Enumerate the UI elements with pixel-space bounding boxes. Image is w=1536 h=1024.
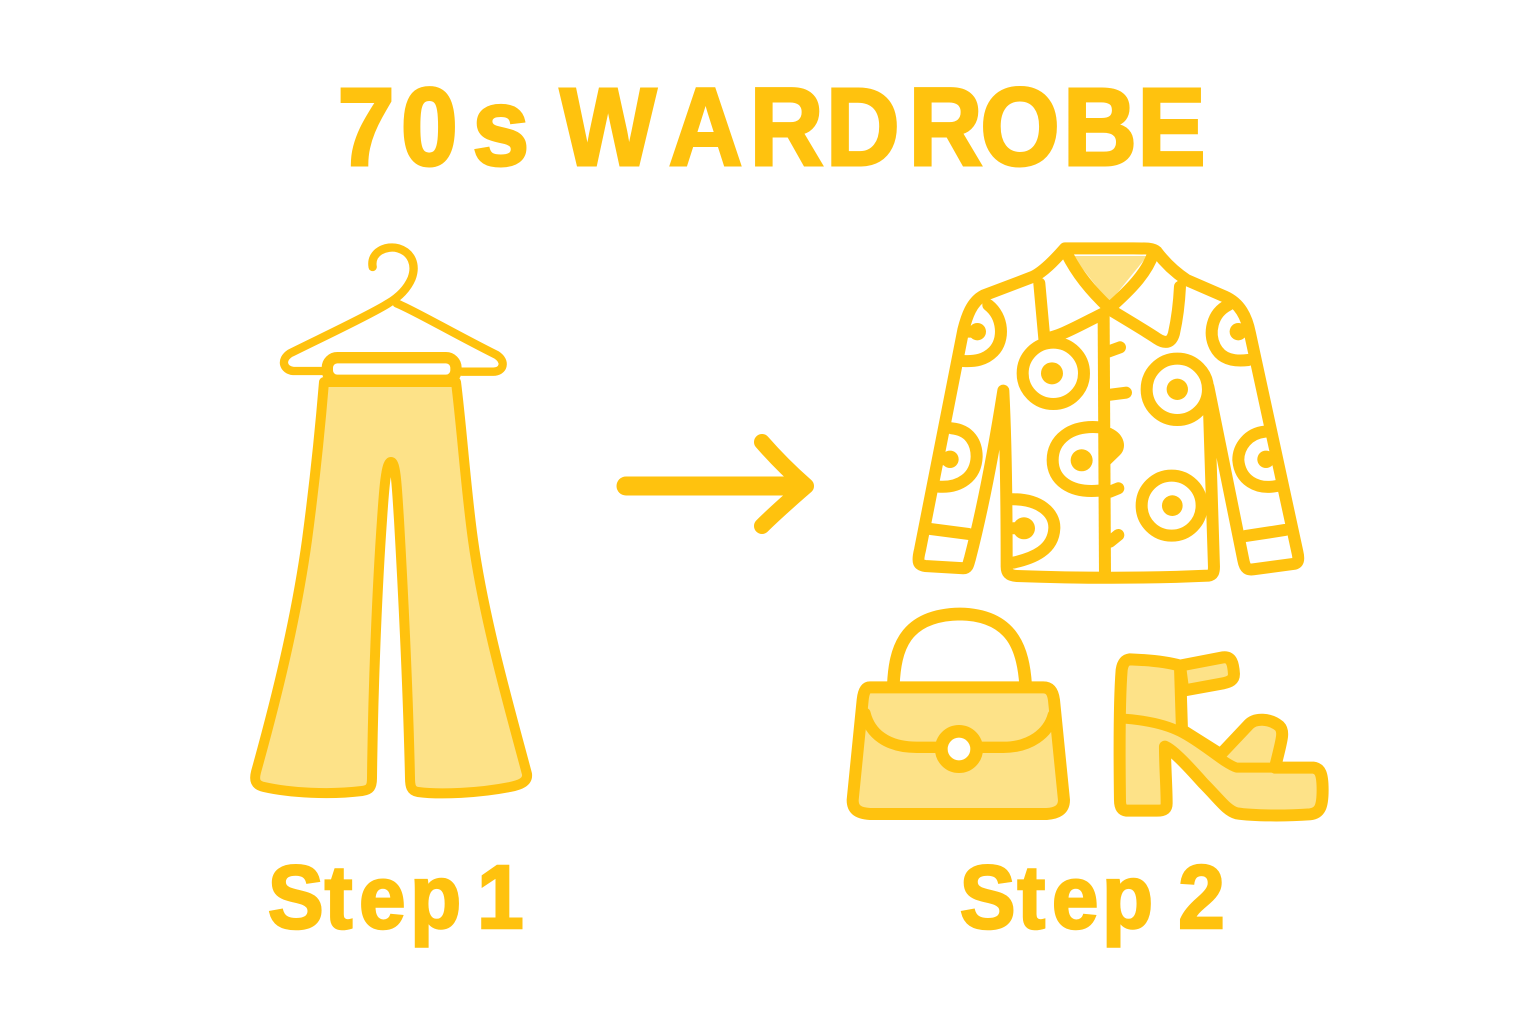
collar fill bbox=[1073, 256, 1147, 303]
jacket outline bbox=[918, 248, 1298, 578]
sandal divider bbox=[1120, 718, 1273, 768]
bag body bbox=[853, 687, 1064, 814]
collar bbox=[1067, 253, 1153, 308]
arrow bbox=[626, 442, 806, 526]
icon: patterned jacket bbox=[918, 248, 1298, 578]
sandal sole and heel bbox=[1120, 659, 1323, 815]
step 2 label: Step 2 bbox=[960, 847, 1225, 948]
icon: platform sandal bbox=[1120, 657, 1323, 815]
bag clasp bbox=[941, 731, 977, 767]
buttons bbox=[1108, 347, 1126, 542]
cuffs bbox=[930, 529, 1285, 536]
sandal strap bbox=[1180, 657, 1234, 691]
placket bbox=[1104, 317, 1105, 573]
connectors to swirl dots bbox=[943, 332, 1272, 528]
bag flap bbox=[865, 713, 1053, 747]
title: 70s WARDROBE bbox=[338, 66, 1206, 189]
icon: flared trousers on a hanger bbox=[255, 247, 527, 793]
icon: hanger bbox=[284, 247, 503, 380]
step 1 label: Step 1 bbox=[268, 847, 524, 948]
bag handle bbox=[893, 614, 1026, 685]
pocket bbox=[1010, 499, 1054, 563]
pattern circles bbox=[1023, 343, 1084, 404]
icon: handbag bbox=[853, 614, 1064, 814]
trousers bbox=[255, 382, 527, 793]
sleeve swirls bbox=[963, 305, 1001, 361]
